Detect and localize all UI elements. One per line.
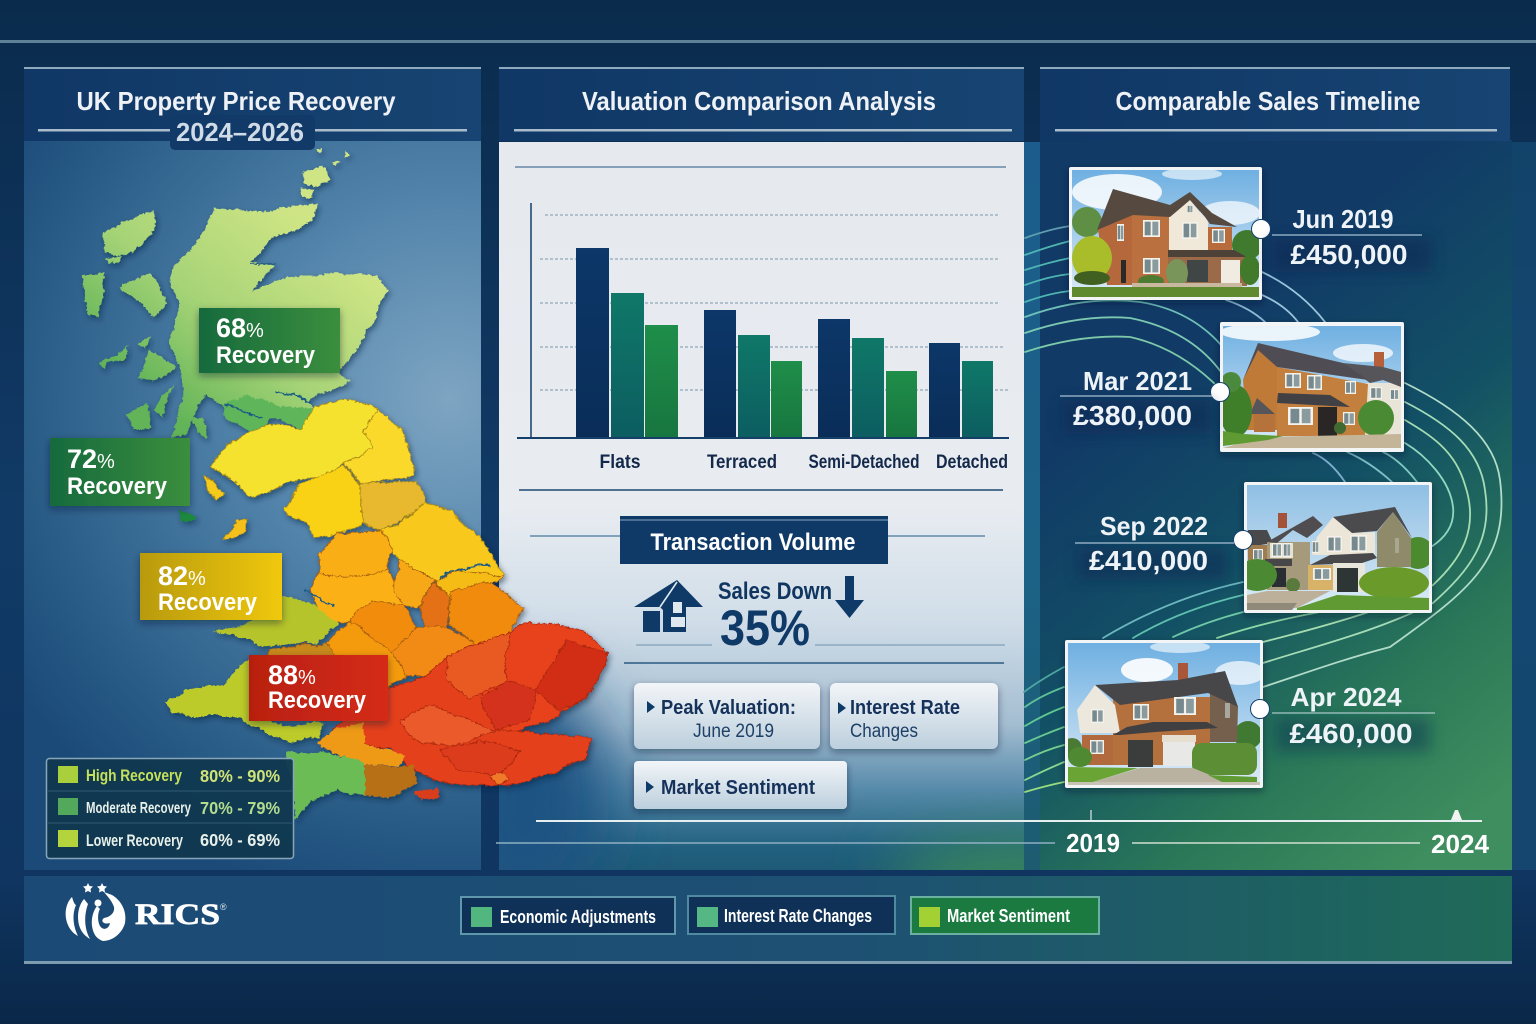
map legend: 60% - 69% xyxy=(200,830,280,850)
sale details: £380,000 xyxy=(1073,400,1192,431)
recovery label: 72% xyxy=(50,438,190,506)
South West England xyxy=(315,722,406,766)
house photo 3 xyxy=(1237,482,1434,613)
sales down statistic: 35% xyxy=(720,600,810,656)
sales down statistic: Sales Down xyxy=(718,578,832,605)
key: interest rate changes: Interest Rate Changes xyxy=(724,906,872,926)
sale details xyxy=(1060,366,1212,434)
callout: interest rate changes: Interest Rate xyxy=(850,696,960,719)
sale details: Jun 2019 xyxy=(1292,204,1394,234)
Northern England xyxy=(204,398,506,580)
sale card: September 2022 xyxy=(1075,482,1434,613)
RICS logo: RICS xyxy=(135,898,220,931)
middle panel header: Valuation Comparison Analysis xyxy=(582,86,936,116)
key: economic adjustments xyxy=(461,897,675,934)
house photo 1 xyxy=(1069,167,1262,300)
recovery label: 72%: Recovery xyxy=(67,473,168,500)
RICS logo: ® xyxy=(220,902,227,912)
sale card: April 2024 xyxy=(1062,640,1435,788)
map legend: High Recovery xyxy=(86,767,183,785)
recovery label: 68% xyxy=(199,308,340,373)
footer bar xyxy=(24,876,1512,964)
map legend: Lower Recovery xyxy=(86,832,184,850)
callout: peak valuation: June 2019 xyxy=(693,721,774,742)
panel: valuation comparison analysis xyxy=(499,67,1024,809)
middle panel body background xyxy=(499,142,1024,870)
recovery label: 88%: Recovery xyxy=(268,687,367,714)
sale details xyxy=(1272,204,1432,272)
callout: peak valuation: Peak Valuation: xyxy=(661,696,796,719)
recovery label: 88% xyxy=(249,655,388,721)
icon: down arrow xyxy=(835,576,864,618)
panel: comparable sales timeline xyxy=(496,67,1512,870)
callout: interest rate changes xyxy=(830,683,998,749)
timeline dot xyxy=(1210,382,1230,402)
South East England xyxy=(332,623,609,787)
right panel header: Comparable Sales Timeline xyxy=(1116,86,1420,116)
sale details: £410,000 xyxy=(1089,545,1208,576)
callout: market sentiment: Market Sentiment xyxy=(661,776,815,799)
timeline axis xyxy=(496,810,1490,859)
bar chart xyxy=(515,167,1009,490)
sales down statistic xyxy=(718,576,864,656)
bar chart: Terraced xyxy=(707,452,777,473)
key: interest rate changes xyxy=(688,896,895,934)
house photo 4 xyxy=(1062,640,1265,788)
recovery label: 82% xyxy=(140,553,282,620)
icon: RICS lion xyxy=(66,883,125,941)
Midlands xyxy=(262,531,525,689)
transaction volume heading xyxy=(530,516,985,564)
left panel header: UK Property Price Recovery xyxy=(76,86,396,116)
sale card: June 2019 xyxy=(1069,167,1432,300)
sale card: March 2021 xyxy=(1060,322,1404,452)
timeline axis: 2024 xyxy=(1431,829,1490,859)
house photo 2 xyxy=(1220,322,1404,452)
UK map regions xyxy=(81,150,609,820)
estuaries xyxy=(225,263,492,606)
left panel header xyxy=(24,67,481,150)
timeline dot xyxy=(1252,220,1270,238)
Scotland and islands xyxy=(81,150,389,438)
bar chart: Flats xyxy=(600,452,640,473)
map legend: 70% - 79% xyxy=(200,798,280,818)
timeline dot xyxy=(1234,530,1252,550)
map legend xyxy=(46,758,294,858)
recovery label: 68%: 68% xyxy=(216,313,264,343)
flowing curves xyxy=(1024,226,1502,792)
sale details xyxy=(1075,511,1234,580)
RICS logo xyxy=(66,883,227,941)
key: economic adjustments: Economic Adjustments xyxy=(500,907,656,927)
timeline dot xyxy=(1250,700,1270,718)
sale details: Mar 2021 xyxy=(1083,366,1192,396)
panel: UK property price recovery map xyxy=(24,67,609,870)
recovery label: 82%: 82% xyxy=(158,561,206,591)
sale details: Sep 2022 xyxy=(1100,511,1208,541)
timeline axis: 2019 xyxy=(1066,828,1120,858)
sale details xyxy=(1272,682,1435,752)
map legend: Moderate Recovery xyxy=(86,800,191,817)
recovery label: 82%: Recovery xyxy=(158,589,258,616)
left panel header: 2024–2026 xyxy=(176,117,304,147)
key: market sentiment xyxy=(911,897,1099,934)
sale details: £450,000 xyxy=(1290,239,1408,270)
sale details: Apr 2024 xyxy=(1290,682,1402,712)
middle panel header xyxy=(499,67,1024,141)
key: market sentiment: Market Sentiment xyxy=(947,906,1070,926)
recovery label: 68%: Recovery xyxy=(216,342,316,369)
callout: peak valuation xyxy=(634,683,820,749)
bar chart: Detached xyxy=(936,452,1008,473)
callout: interest rate changes: Changes xyxy=(850,721,918,742)
Wales xyxy=(211,596,338,647)
recovery label: 88%: 88% xyxy=(268,660,316,690)
recovery label: 72%: 72% xyxy=(67,444,115,474)
map legend: 80% - 90% xyxy=(200,766,280,786)
right panel header xyxy=(1040,67,1510,141)
transaction volume heading: Transaction Volume xyxy=(650,529,856,556)
bar chart: Semi-Detached xyxy=(808,452,920,473)
icon: house xyxy=(634,580,703,632)
sale details: £460,000 xyxy=(1290,718,1412,749)
callout: market sentiment xyxy=(634,761,847,809)
